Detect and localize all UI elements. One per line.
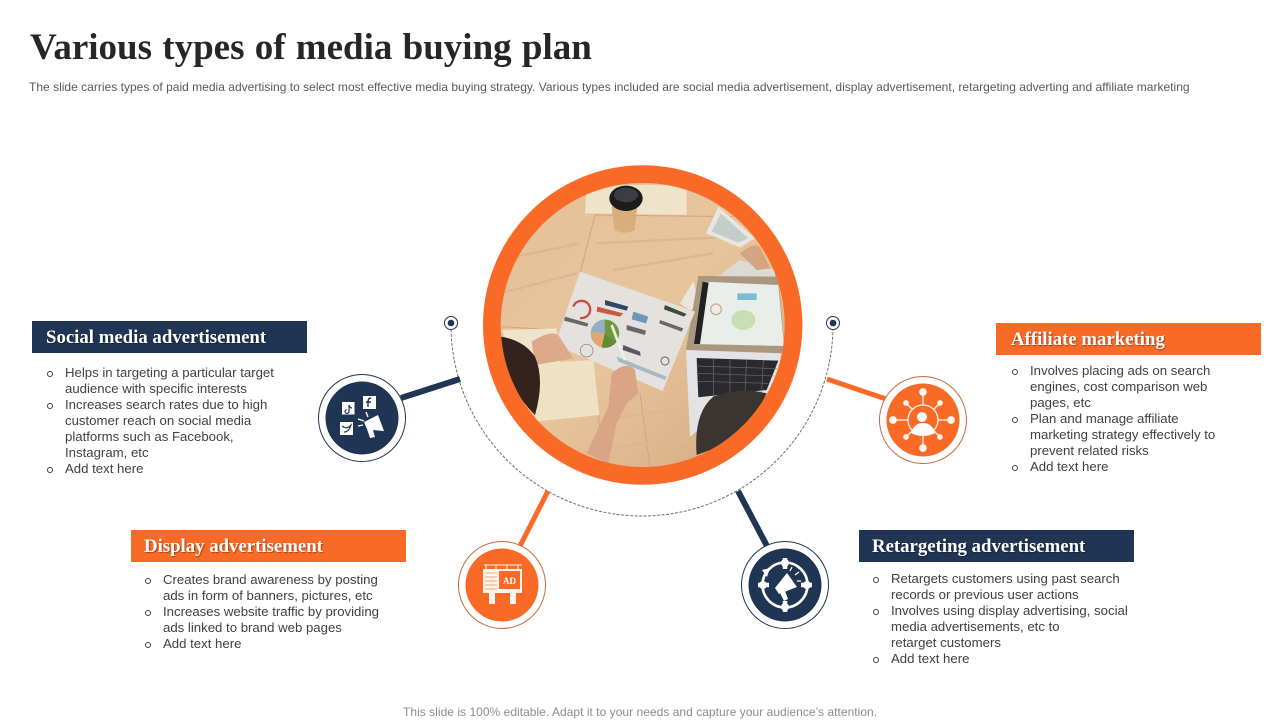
panel: affiliate marketing xyxy=(996,323,1261,474)
infographic sheet xyxy=(555,272,695,391)
bullets: retargeting: media advertisements, etc to xyxy=(891,619,1060,634)
central ring xyxy=(492,174,793,476)
bullets: affiliate: Plan and manage affiliate xyxy=(1030,411,1179,426)
heading: display xyxy=(131,530,406,562)
connector: display xyxy=(520,491,548,546)
heading: affiliate: Affiliate marketing xyxy=(1011,329,1165,350)
bullets: social media: Increases search rates due to high xyxy=(65,397,267,412)
paper under hand right xyxy=(693,260,775,280)
connector: social xyxy=(401,379,460,398)
bullets: social media: Instagram, etc xyxy=(65,445,149,460)
arc end marker left xyxy=(444,316,458,330)
subtitle text: The slide carries types of paid media advertising to select most effective media buying strategy. Various types included are social media advertisement, display advertisement, retargeting adverting and affiliate marketing xyxy=(29,80,1190,94)
heading: social media: Social media advertisement xyxy=(46,327,266,348)
bullets: affiliate: Involves placing ads on search xyxy=(1030,363,1210,378)
hands xyxy=(532,333,573,365)
bullets: retargeting: retarget customers xyxy=(891,635,1001,650)
heading: affiliate xyxy=(996,323,1261,355)
heading: retargeting xyxy=(859,530,1134,562)
bullets: retargeting: records or previous user actions xyxy=(891,587,1079,602)
bullets: social media: platforms such as Facebook, xyxy=(65,429,234,444)
bullets: affiliate: marketing strategy effectively to xyxy=(1030,427,1215,442)
head bottom right xyxy=(696,391,767,455)
icon: network affiliate xyxy=(880,376,966,464)
bullets: social media: Add text here xyxy=(65,461,143,476)
heading: social media xyxy=(32,321,307,353)
bullets: display: Increases website traffic by providing xyxy=(163,604,379,619)
notebook top xyxy=(585,185,687,215)
bullets: affiliate: engines, cost comparison web xyxy=(1030,379,1207,394)
bullets: display: Add text here xyxy=(163,636,241,651)
bullets: display: ads in form of banners, pictures, etc xyxy=(163,588,373,603)
bullets: retargeting: Retargets customers using past search xyxy=(891,571,1120,586)
bullets: retargeting xyxy=(873,571,1128,666)
heading: display: Display advertisement xyxy=(144,536,323,557)
bullets: social media xyxy=(47,365,274,476)
laptop xyxy=(686,276,785,353)
icon: retargeting xyxy=(742,542,828,628)
bullets: affiliate xyxy=(1012,363,1215,474)
hair left xyxy=(501,337,540,415)
bullets: affiliate: pages, etc xyxy=(1030,395,1091,410)
panel: display advertisement xyxy=(131,530,406,651)
bullets: affiliate: prevent related risks xyxy=(1030,443,1149,458)
bullets: display xyxy=(145,572,379,651)
bullets: display: ads linked to brand web pages xyxy=(163,620,342,635)
bullets: affiliate: Add text here xyxy=(1030,459,1108,474)
icon: social media xyxy=(318,374,406,462)
dashed arc xyxy=(451,325,833,516)
bullets: social media: customer reach on social media xyxy=(65,413,251,428)
icon: billboard ad xyxy=(458,542,546,628)
arc end marker right xyxy=(826,316,840,330)
connector: retargeting xyxy=(738,491,767,546)
central photo xyxy=(500,183,785,467)
central diagram graphic xyxy=(318,165,967,629)
bullets: display: Creates brand awareness by posting xyxy=(163,572,378,587)
bullets: retargeting: Add text here xyxy=(891,651,969,666)
bullets: social media: Helps in targeting a particular target xyxy=(65,365,274,380)
panel: retargeting advertisement xyxy=(859,530,1134,666)
connector: affiliate xyxy=(827,379,886,399)
title: Various types of media buying plan xyxy=(30,27,592,68)
notebook left xyxy=(535,360,599,422)
icon: billboard ad: AD xyxy=(503,576,516,586)
footer note: This slide is 100% editable. Adapt it to your needs and capture your audience’s attention. xyxy=(403,705,877,719)
tablet top right xyxy=(706,207,755,247)
panel: social media advertisement xyxy=(32,321,307,476)
bullets: social media: audience with specific interests xyxy=(65,381,247,396)
bullets: retargeting: Involves using display advertising, social xyxy=(891,603,1128,618)
heading: retargeting: Retargeting advertisement xyxy=(872,536,1085,557)
coffee cup xyxy=(612,207,637,233)
